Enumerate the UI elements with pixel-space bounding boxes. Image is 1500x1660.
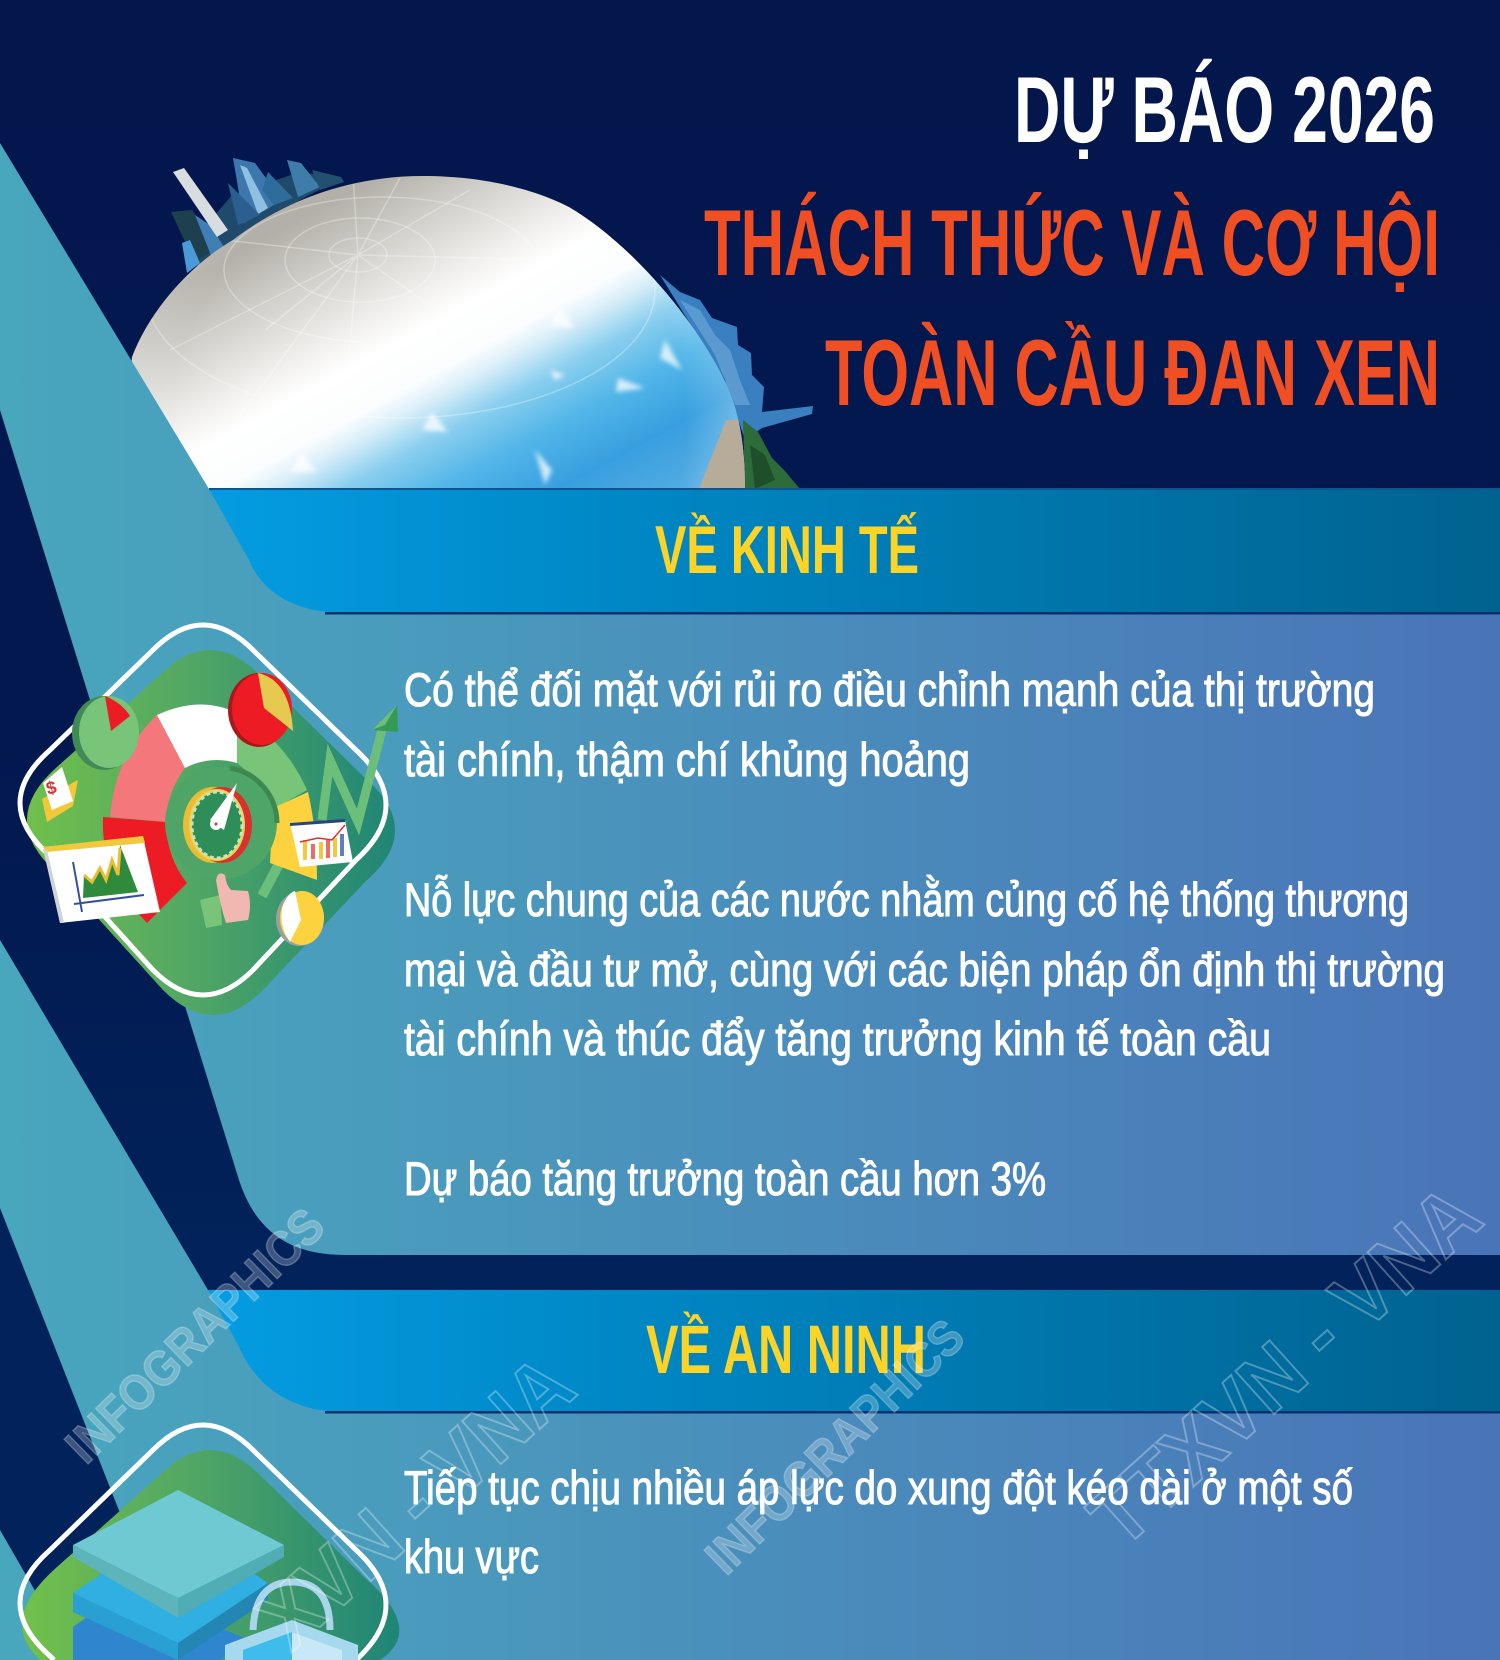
growth arrow [262, 705, 398, 896]
bullet 1: tài chính, thậm chí khủng hoảng [404, 733, 970, 786]
pie chart: white and yellow [276, 891, 324, 946]
panel: security body background [0, 940, 1500, 1660]
gauge ring [103, 704, 317, 923]
green diamond [22, 1450, 399, 1660]
text block: economy [404, 663, 1445, 1205]
icon: economy gauge and charts [20, 625, 398, 1015]
chart card [43, 836, 160, 923]
watermarks: XVN - VNA [240, 1337, 591, 1660]
heading: economy: VỀ KINH TẾ [655, 511, 919, 588]
watermarks [55, 1167, 1498, 1660]
envelope with dollar note [42, 767, 78, 822]
bullet 2 [404, 873, 1445, 1065]
icon: security layers and padlock [20, 1425, 399, 1660]
title [704, 57, 1440, 425]
text block: security [404, 1461, 1353, 1583]
middle layer [73, 1523, 268, 1660]
bullet 3: Dự báo tăng trưởng toàn cầu hơn 3% [404, 1152, 1046, 1205]
pie chart: red and yellow [228, 673, 293, 747]
pie chart: green and red [72, 696, 139, 770]
panel: economy body background [0, 143, 1500, 1255]
small bar chart card [290, 819, 353, 867]
city skyline: right rim of globe [660, 275, 813, 489]
thumbs up [200, 873, 250, 928]
globe illustration with cities [110, 158, 813, 490]
bullet 2: tài chính và thúc đẩy tăng trưởng kinh tế toàn cầu [404, 1012, 1271, 1065]
globe sphere [132, 176, 745, 489]
white outline [20, 1425, 386, 1660]
heading: security: VỀ AN NINH [646, 1311, 926, 1388]
bullet 1 [404, 663, 1375, 786]
panel: section header band, economy [209, 488, 1500, 614]
top layer [73, 1490, 284, 1618]
padlock [225, 1582, 358, 1660]
text block: security: khu vực [404, 1530, 539, 1583]
city skyline: upper left of globe [171, 158, 344, 275]
bottom-left teal corner strip [0, 1530, 75, 1660]
white outline [20, 625, 386, 995]
green diamond [27, 650, 395, 1015]
envelope with dollar note: $ [44, 777, 59, 799]
watermarks: INFOGRAPHICS [695, 1308, 975, 1585]
panel: section header band, security [208, 1290, 1500, 1414]
gauge centre dial [165, 767, 277, 879]
bottom layer [73, 1590, 250, 1660]
watermarks: INFOGRAPHICS [55, 1197, 335, 1474]
